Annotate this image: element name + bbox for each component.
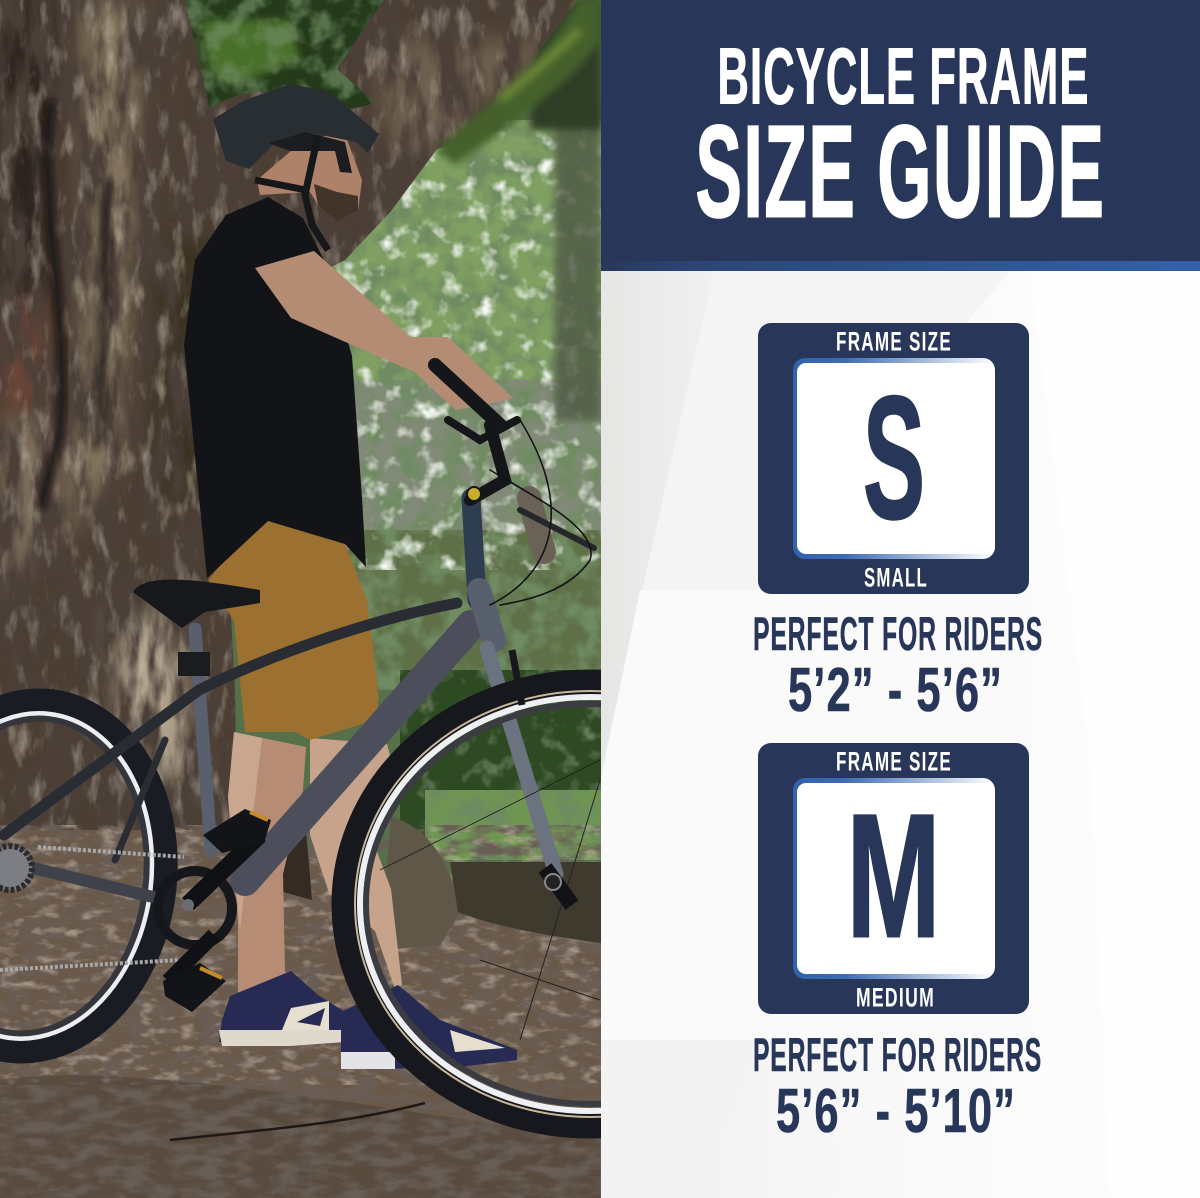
person: legs [228, 732, 402, 996]
label: frame size: FRAME SIZE [836, 326, 952, 356]
person: shorts [208, 521, 379, 740]
rider text: medium: 5’6” - 5’10” [776, 1077, 1016, 1146]
bicycle frame [4, 498, 556, 897]
person: t-shirt [184, 197, 366, 578]
tree root [283, 791, 601, 950]
size card: medium [758, 743, 1029, 1014]
panel: cyclist photo [0, 0, 601, 1198]
chain and cassette [0, 846, 184, 970]
person: head and helmet [213, 84, 379, 250]
white tile [797, 363, 995, 554]
crankset and pedals [158, 809, 271, 1012]
white tile [797, 783, 995, 974]
label: small: SMALL [864, 562, 928, 592]
moss on limb [185, 0, 601, 165]
inner blue edge [793, 358, 995, 559]
rider text: small [753, 607, 1043, 725]
bicycle saddle and seatpost [133, 580, 260, 676]
rear bicycle wheel [0, 685, 185, 1067]
panel: white size guide background [601, 271, 1200, 1198]
label: medium: MEDIUM [856, 982, 935, 1012]
rider text: small: 5’2” - 5’6” [788, 656, 1003, 725]
header band [601, 0, 1200, 271]
bicycle handlebar and cables [435, 365, 594, 605]
person: sneakers [219, 971, 517, 1069]
front bicycle wheel [332, 649, 601, 1138]
inner blue edge [793, 778, 995, 979]
letter S: S [863, 361, 925, 556]
label: frame size: FRAME SIZE [836, 746, 952, 776]
rider text: medium [753, 1028, 1042, 1146]
tree trunk and limb [0, 0, 601, 840]
ground [0, 825, 601, 1198]
person: arm and hand [255, 251, 513, 410]
background foliage [330, 0, 601, 860]
size card: small [758, 323, 1029, 594]
letter M: M [846, 778, 940, 974]
